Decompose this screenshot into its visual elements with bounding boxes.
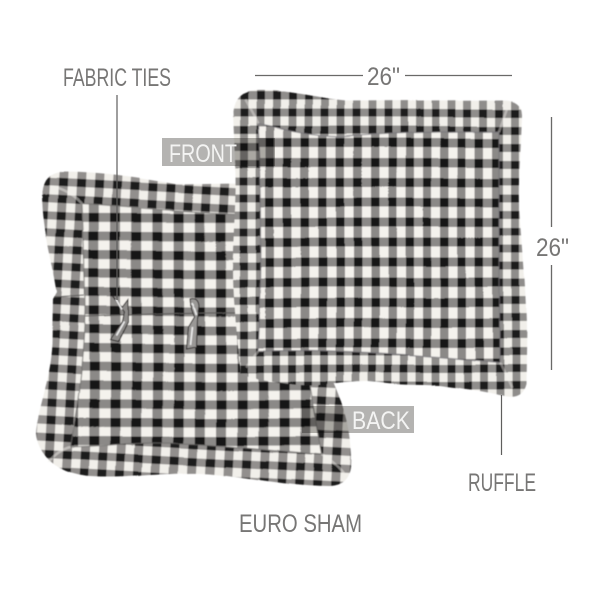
fabric tie: right [186,298,199,348]
front pillow ruffle [233,91,527,397]
front corner folds [245,100,512,388]
back panel seam shading [70,204,322,455]
ruffle label: RUFFLE [468,469,536,497]
width dimension: 26" [367,63,400,91]
back label band [302,406,414,435]
front pillow [233,91,527,397]
front panel seam shading [258,124,500,362]
back pillow [36,172,351,487]
front pillow panel [258,124,500,362]
fabric ties label: FABRIC TIES [63,64,171,92]
fabric tie: left [110,296,128,342]
fabric ties leader line [116,95,118,300]
back corner folds [48,188,344,474]
back flap seam [54,296,240,317]
back pillow panel [70,204,322,455]
back label band: BACK [352,407,410,435]
height dimension: 26" [536,234,569,262]
ruffle leader line [500,395,502,455]
front label band: FRONT [169,140,237,168]
euro sham caption: EURO SHAM [239,510,362,538]
back pillow ruffle [36,172,351,487]
